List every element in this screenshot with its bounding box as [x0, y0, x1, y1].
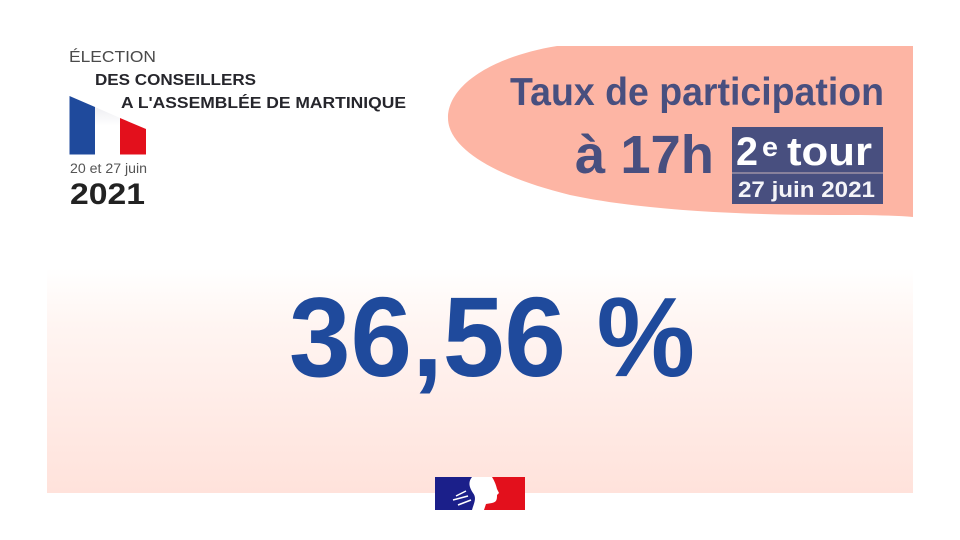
text: round date: 27 juin 2021 [738, 177, 875, 202]
text: second round [736, 130, 872, 174]
panel: result background [47, 268, 913, 493]
icon: République française logo [435, 477, 525, 510]
badge: round and date [732, 127, 883, 204]
text: second round: 2 [736, 130, 758, 174]
text: second round: e [762, 132, 778, 162]
text: second round: tour [787, 130, 872, 174]
heading: des conseillers: DES CONSEILLERS [95, 72, 256, 89]
heading: election: ÉLECTION [69, 47, 156, 66]
heading: time: à 17h [575, 125, 714, 185]
text: year: 2021 [70, 178, 145, 211]
icon: French flag [70, 96, 146, 154]
text: dates: 20 et 27 juin [70, 161, 147, 176]
heading: taux de participation: Taux de participation [510, 71, 884, 114]
Marianne profile [469, 477, 499, 510]
panel: election logo [69, 47, 406, 211]
heading: assemblée de Martinique: A L'ASSEMBLÉE DE MARTINIQUE [121, 93, 406, 112]
result: turnout percentage: 36,56 % [289, 274, 695, 400]
peach shape [448, 46, 913, 217]
panel: participation header [448, 46, 913, 217]
